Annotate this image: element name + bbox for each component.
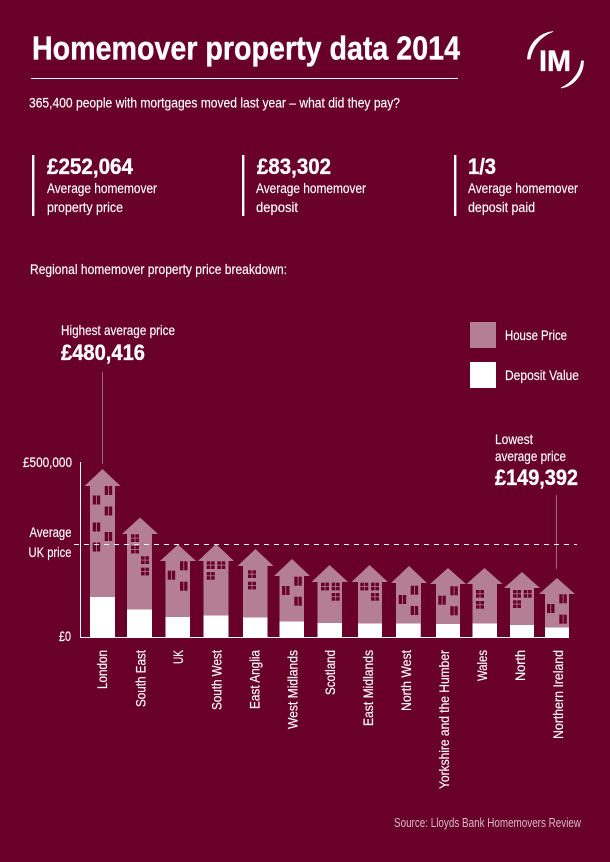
region labels: South West [208, 650, 224, 710]
stat: deposit share [454, 154, 578, 216]
region labels: Scotland [322, 650, 338, 695]
title: Homemover property data 2014 [32, 30, 460, 68]
region labels: Northern Ireland [550, 650, 566, 739]
house: North [504, 572, 540, 637]
house: South West [198, 544, 234, 637]
axis labels: £500,000 [23, 455, 72, 470]
axis labels: UK price [28, 544, 72, 560]
stat: average deposit [242, 154, 366, 216]
legend: Deposit Value [505, 367, 579, 383]
house: South East [122, 518, 158, 637]
callout: lowest price: Lowest [495, 431, 533, 447]
stat: deposit share: Average homemover [468, 180, 578, 196]
region labels: East Midlands [360, 650, 376, 726]
house: West Midlands [274, 559, 310, 637]
house: East Anglia [238, 549, 274, 637]
stat: average deposit: £83,302 [257, 154, 331, 179]
stat: average price: Average homemover [47, 180, 157, 196]
house: London [84, 469, 120, 637]
region labels: South East [132, 650, 148, 707]
callout: highest price: £480,416 [61, 340, 145, 365]
house: East Midlands [352, 565, 388, 637]
stat: average deposit: deposit [256, 199, 298, 215]
region labels: West Midlands [284, 650, 300, 729]
subtitle: 365,400 people with mortgages moved last year – what did they pay? [29, 94, 400, 110]
house: North West [391, 566, 427, 637]
callout: lowest price [495, 431, 578, 569]
house: Northern Ireland [539, 578, 575, 637]
region labels: London [94, 650, 110, 689]
region labels: Yorkshire and the Humber [436, 650, 452, 789]
axis labels [23, 455, 72, 644]
logo: IM [528, 32, 584, 88]
house: Yorkshire and the Humber [430, 568, 466, 637]
average line [74, 544, 577, 546]
callout: lowest price: average price [495, 448, 566, 464]
stat: deposit share: 1/3 [468, 154, 496, 179]
stat: deposit share: deposit paid [468, 199, 535, 215]
stat: average price: property price [47, 199, 123, 215]
callout: lowest price: £149,392 [495, 465, 578, 490]
axes [80, 462, 569, 638]
house: UK [160, 544, 196, 637]
legend: House Price [505, 327, 567, 343]
logo: IM: IM [539, 45, 571, 78]
chart heading: Regional homemover property price breakdown: [30, 261, 287, 277]
stat: average deposit: Average homemover [256, 180, 366, 196]
stat: average price [32, 154, 157, 216]
house: Scotland [312, 565, 348, 637]
house: Wales [466, 568, 502, 637]
axis labels: Average [30, 524, 72, 540]
title rule [31, 78, 458, 79]
region labels [94, 650, 566, 789]
region labels: Wales [474, 650, 490, 681]
callout: highest price [61, 322, 175, 464]
region labels: North [512, 650, 528, 681]
stat: average price: £252,064 [47, 154, 133, 179]
legend [470, 322, 579, 388]
axis labels: £0 [59, 629, 71, 644]
callout: highest price: Highest average price [61, 322, 175, 338]
region labels: UK [170, 650, 186, 664]
region labels: North West [398, 650, 414, 711]
region labels: East Anglia [246, 650, 262, 709]
